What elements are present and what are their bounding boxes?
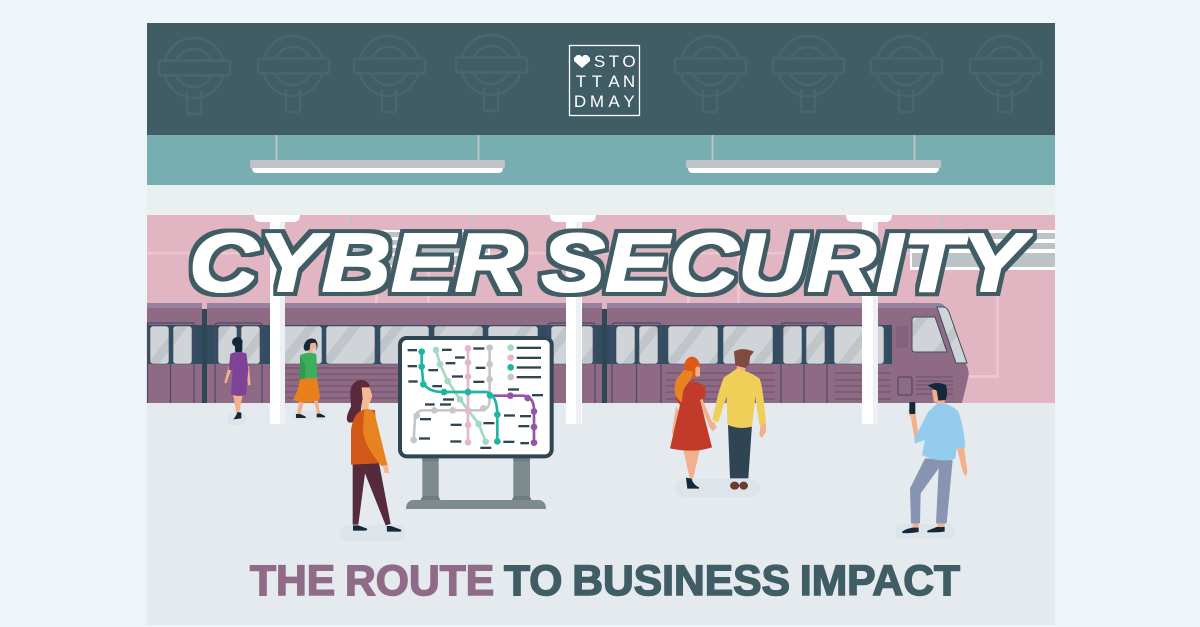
- logo: Stott and May: O: [622, 52, 636, 71]
- train cab windows: [912, 307, 967, 363]
- logo: Stott and May: D: [574, 92, 586, 111]
- icons: underground roundels: [159, 35, 1041, 114]
- figures: couple and man with phone: [670, 349, 967, 539]
- door frames: [148, 323, 912, 403]
- person: man with phone: [896, 383, 967, 539]
- logo: Stott and May: N: [623, 72, 635, 91]
- windows: [150, 326, 884, 364]
- train: [147, 303, 969, 403]
- ceiling lights: [250, 135, 941, 173]
- person: woman in orange top: [340, 380, 405, 541]
- car couplings: [202, 309, 607, 403]
- logo: Stott and May: M: [590, 92, 604, 111]
- title: CYBER SECURITY: [189, 216, 1033, 309]
- platform pillars: [254, 215, 892, 424]
- logo: Stott and May: A: [608, 92, 620, 111]
- figures: two people walking by the train: [224, 337, 405, 541]
- panel: pink back wall: [147, 215, 1055, 403]
- map routes: [414, 348, 534, 443]
- logo: Stott and May: S: [594, 52, 605, 71]
- window band: [147, 325, 892, 364]
- person: man in yellow shirt: [712, 349, 766, 490]
- logo: Stott and May: T: [592, 72, 602, 91]
- louvres: [269, 368, 953, 399]
- person: woman in purple dress: [224, 337, 251, 425]
- cab vent: [897, 326, 907, 348]
- panel: station ceiling: [147, 23, 1055, 215]
- subtitle: THE ROUTE TO BUSINESS IMPACT: [250, 557, 960, 605]
- logo: Stott and May: T: [576, 72, 586, 91]
- map labels and legend: [408, 347, 543, 449]
- logo: Stott and May: [570, 46, 640, 116]
- logo: Stott and May: A: [608, 72, 620, 91]
- shadow under couple: [676, 479, 760, 497]
- person: woman in red dress: [670, 357, 717, 489]
- logo: Stott and May: T: [609, 52, 619, 71]
- board stand: [406, 457, 546, 509]
- train body: [147, 308, 969, 403]
- transit map board: [400, 338, 552, 509]
- panel: platform floor: [147, 403, 1055, 625]
- logo: Stott and May: Y: [623, 92, 635, 111]
- board frame: [400, 338, 552, 456]
- map stations: [410, 344, 537, 446]
- person: woman in green top and orange skirt: [293, 339, 327, 420]
- train roof stripe: [147, 303, 946, 308]
